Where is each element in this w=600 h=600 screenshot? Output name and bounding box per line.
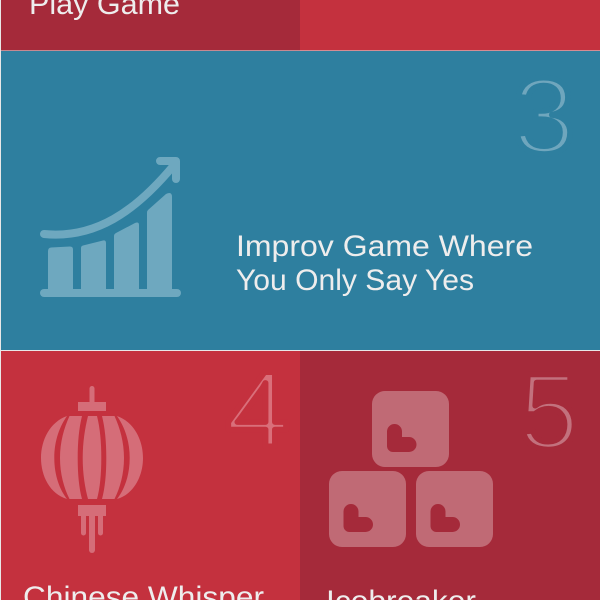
numeral 4: 4 — [226, 348, 290, 470]
icon: chinese lantern — [41, 386, 143, 553]
panel: game 1 — [1, 0, 300, 50]
heading: improv game — [236, 230, 533, 297]
numeral 3: 3 — [513, 55, 575, 176]
panel: game 3 — [1, 51, 600, 350]
icon: toy blocks with hearts — [329, 391, 493, 547]
icon: rising bar chart — [40, 161, 181, 297]
panel: game 2 — [300, 0, 600, 50]
panel: game 4 — [1, 348, 300, 600]
heading: improv game: You Only Say Yes — [236, 264, 474, 297]
heading: improv game: Improv Game Where — [236, 230, 533, 263]
panel: game 5 — [300, 350, 600, 600]
numeral 5: 5 — [519, 350, 579, 472]
